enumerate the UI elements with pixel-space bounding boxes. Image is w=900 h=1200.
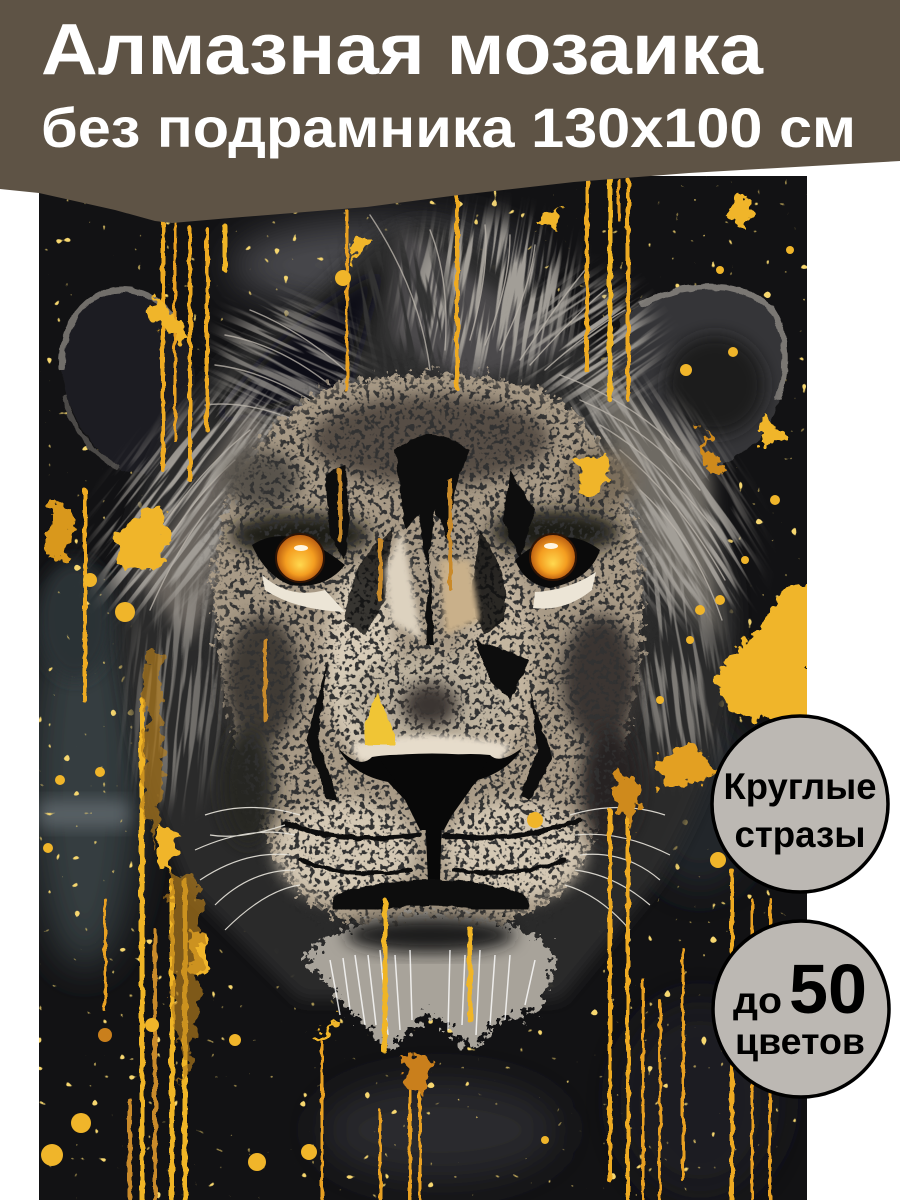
face speckle texture (215, 374, 642, 925)
badge: up to 50 colours (713, 921, 889, 1097)
gold on nose (364, 692, 395, 745)
muzzle lines and mouth (285, 820, 580, 905)
badge: up to 50 colours: цветов (735, 1021, 865, 1062)
header band (0, 0, 900, 223)
gold background flecks (39, 176, 807, 1200)
right whiskers (565, 808, 670, 930)
painting: lion with gold paint (30, 176, 815, 1200)
badge: round rhinestones: стразы (734, 814, 866, 855)
nose (338, 748, 522, 880)
left eye (252, 534, 345, 612)
gold droplets (41, 246, 794, 1171)
chin fur (305, 915, 555, 1050)
right eye (515, 534, 600, 609)
lion mane (67, 206, 781, 1000)
title line 1: Алмазная мозаика (41, 10, 764, 90)
gold splashes (50, 195, 815, 1095)
left whiskers (195, 808, 300, 930)
badge: round rhinestones (712, 716, 888, 892)
nose bridge light stripe (385, 530, 422, 640)
lion left ear (62, 289, 195, 480)
gold drip smears on left (142, 650, 200, 1080)
right bridge stripe (440, 560, 480, 635)
title line 2: без подрамника 130х100 см (41, 96, 856, 159)
mane strands (150, 215, 725, 620)
forehead dark markings (306, 435, 552, 800)
badge: round rhinestones: Круглые (724, 766, 876, 807)
badge: up to 50 colours: до (733, 980, 782, 1021)
muzzle top (350, 683, 512, 762)
lion right ear (600, 287, 785, 480)
painting background (30, 176, 807, 1200)
gold drips (85, 180, 770, 1200)
badge: up to 50 colours: 50 (789, 950, 867, 1028)
lion face base (215, 374, 642, 925)
